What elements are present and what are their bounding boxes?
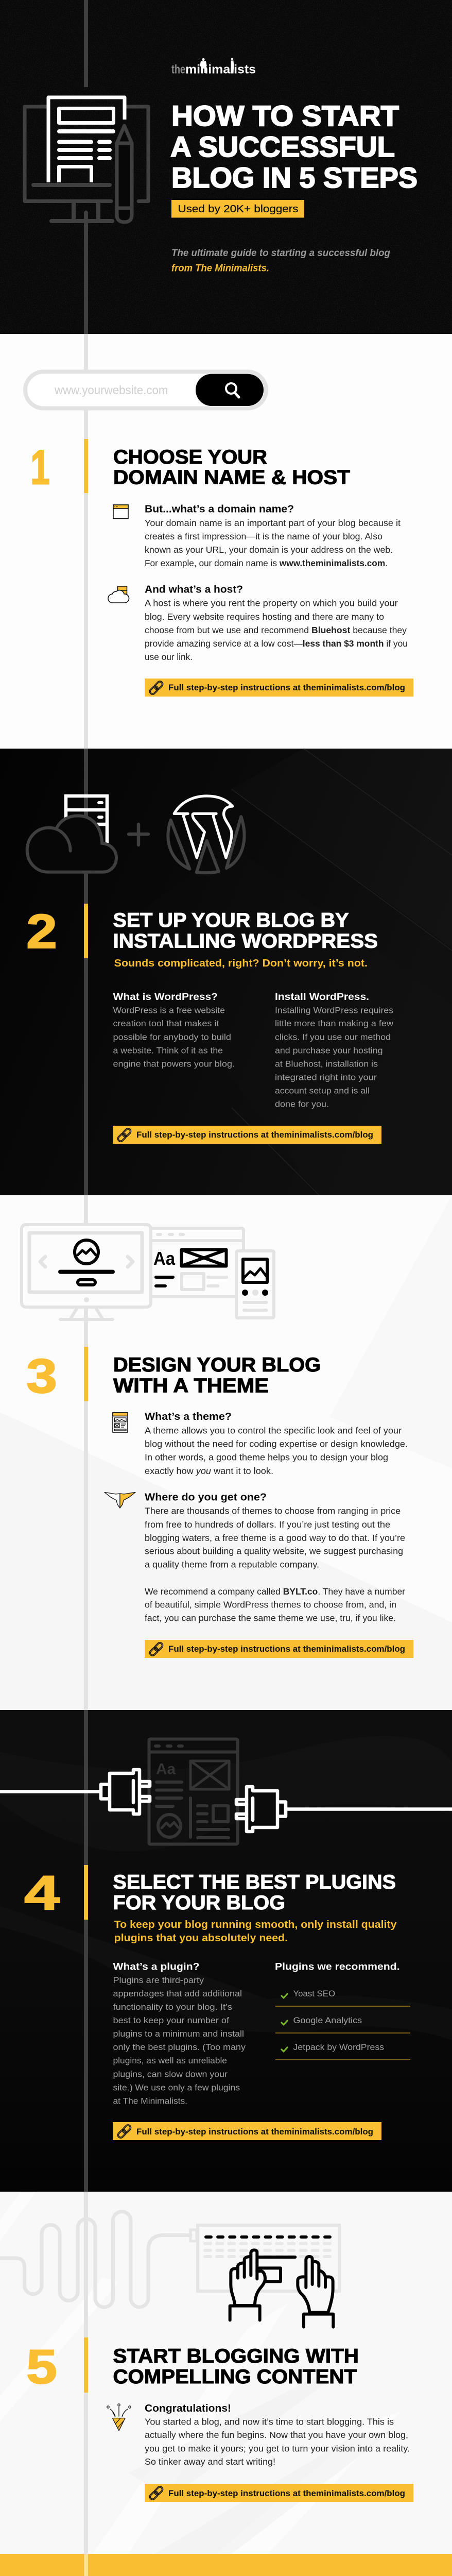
text: install WordPress: at Bluehost, installation is (275, 1059, 378, 1069)
text: congratulations: You started a blog, and now it’s time to start blogging. This is (145, 2416, 394, 2427)
text: where to get one: There are thousands of themes to choose from ranging in price (145, 1506, 401, 1516)
icon: left plug (0, 1770, 150, 1814)
text: what is WordPress: What is WordPress? (113, 991, 218, 1003)
step 1 marker (84, 439, 88, 493)
button: instructions (113, 2122, 381, 2140)
text: what's a plugin: What’s a plugin? (113, 1961, 200, 1972)
cable (0, 2212, 190, 2307)
heading: step 5: START BLOGGING WITH (113, 2345, 359, 2367)
icon: monitor, page and pencil (25, 97, 148, 222)
text: what is WordPress: WordPress is a free website (113, 1006, 225, 1015)
text: where to get one: serious about building a quality website, we suggest purchasing (145, 1546, 403, 1556)
text: host (145, 584, 408, 662)
icon: plus (129, 824, 148, 845)
number 4: 4 (24, 1866, 60, 1920)
text: install WordPress: Installing WordPress requires (275, 1006, 393, 1015)
icon: theme layout (113, 1413, 128, 1432)
subheading: step 2: Sounds complicated, right? Don’t worry, it’s not. (114, 958, 368, 969)
text: where to get one (145, 1492, 405, 1623)
item: Jetpack by WordPress (275, 2043, 410, 2060)
text: host: provide amazing service at a low cost—less than $3 month if you (145, 638, 408, 649)
text: domain name: known as your URL, your domain is your address on the web. (145, 545, 393, 555)
badge: used by bloggers (171, 200, 304, 217)
icon: winged logo (105, 1492, 135, 1508)
panel: step 1 (0, 334, 452, 749)
panel: footer call to action (0, 2554, 452, 2576)
text: install WordPress: account setup and is all (275, 1086, 370, 1095)
text: what's a theme: In other words, a good theme helps you to design your blog (145, 1452, 388, 1463)
text: what's a plugin: site.) We use only a few plugins (113, 2083, 240, 2092)
subheading: step 4: plugins that you absolutely need. (114, 1933, 288, 1944)
text: what's a plugin: best to keep your number of (113, 2016, 229, 2025)
text: where to get one: blogging waters, a free theme is a good way to do that. If you’re (145, 1533, 405, 1543)
text: what's a plugin: only the best plugins. (Too many (113, 2043, 246, 2052)
heading: step 5 (113, 2345, 359, 2388)
logo: The Minimalists: the (171, 63, 185, 76)
timeline: step 5 (84, 2192, 88, 2554)
text: what's a theme: blog without the need for coding expertise or design knowledge. (145, 1438, 408, 1449)
panel: step 3 (0, 1195, 452, 1710)
text: what's a theme: exactly how you want it to look. (145, 1466, 273, 1476)
text: what's a theme (145, 1411, 408, 1476)
gray keys (205, 2244, 333, 2257)
button: instructions: Full step-by-step instructions at theminimalists.com/blog (168, 683, 405, 692)
icon: WordPress logo (168, 796, 244, 873)
number 5: 5 (26, 2340, 57, 2394)
title: BLOG IN 5 STEPS (171, 161, 418, 194)
logo: The Minimalists (171, 58, 256, 76)
text: congratulations: So tinker away and start writing! (145, 2456, 275, 2467)
text: congratulations: actually where the fun begins. Now that you have your own blog, (145, 2430, 408, 2440)
black keys (206, 2235, 333, 2239)
heading: step 1 (113, 446, 350, 488)
text: what is WordPress: engine that powers your blog. (113, 1059, 235, 1069)
timeline end (86, 2554, 133, 2576)
step 5 marker (84, 2337, 88, 2393)
subtitle (171, 248, 390, 274)
illustration: keyboard (0, 2212, 339, 2327)
text: host: And what’s a host? (145, 584, 243, 596)
text: what is WordPress: possible for anybody to build (113, 1033, 231, 1042)
browser window: Aa (153, 1248, 176, 1269)
timeline: hero (84, 0, 88, 334)
text: where to get one: Where do you get one? (145, 1492, 267, 1503)
item: Yoast SEO (275, 1989, 410, 2006)
text: install WordPress: integrated right into your (275, 1073, 377, 1082)
browser window (150, 1228, 244, 1297)
timeline: step 4 (84, 1710, 88, 2192)
heading: step 4: SELECT THE BEST PLUGINS (113, 1871, 396, 1893)
subheading: step 4: To keep your blog running smooth, only install quality (114, 1919, 397, 1930)
subtitle: The ultimate guide to starting a successful blog (171, 248, 390, 259)
button: instructions (145, 679, 413, 697)
text: where to get one: fact, you can purchase the same theme we use, tru, if you like. (145, 1613, 396, 1623)
text: what's a plugin: appendages that add additional (113, 1989, 242, 1998)
item: Google Analytics (275, 2016, 410, 2033)
timeline: step 3 (84, 1195, 88, 1710)
text: congratulations (145, 2403, 410, 2467)
item: Jetpack by WordPress: Jetpack by WordPress (293, 2043, 384, 2052)
search bar (25, 372, 266, 408)
heading: step 3 (113, 1354, 321, 1397)
illustration: responsive theme (22, 1225, 274, 1319)
text: what's a theme: A theme allows you to control the specific look and feel of your (145, 1425, 402, 1435)
icon: right plug (236, 1787, 452, 1832)
icon: cloud server (108, 586, 129, 603)
list: recommended plugins (275, 1961, 410, 2060)
heading: step 2 (113, 909, 378, 952)
text: host: choose from but we use and recommend Bluehost because they (145, 625, 407, 635)
text: congratulations: Congratulations! (145, 2403, 231, 2414)
text: what's a plugin: functionality to your blog. It’s (113, 2003, 232, 2012)
desktop monitor (22, 1225, 151, 1319)
button: instructions: Full step-by-step instructions at theminimalists.com/blog (136, 2127, 373, 2137)
text: domain name: Your domain name is an important part of your blog because it (145, 518, 401, 528)
text: what's a plugin (113, 1961, 246, 2106)
subheading: step 4 (114, 1919, 397, 1944)
text: host: use our link. (145, 652, 193, 662)
text: where to get one: from free to hundreds of dollars. If you’re just testing out the (145, 1519, 390, 1530)
timeline: step 2 (84, 749, 88, 1195)
text: what is WordPress: creation tool that makes it (113, 1019, 219, 1028)
heading: step 2: SET UP YOUR BLOG BY (113, 909, 349, 931)
badge: used by bloggers: Used by 20K+ bloggers (178, 204, 299, 215)
text: install WordPress: and purchase your hosting (275, 1046, 383, 1055)
text: domain name: For example, our domain name is www.theminimalists.com. (145, 558, 388, 568)
panel: step 4 (0, 1710, 452, 2192)
text: install WordPress (275, 991, 393, 1109)
text: what's a plugin: plugins to a minimum and install (113, 2029, 244, 2039)
heading: step 1: DOMAIN NAME & HOST (113, 467, 350, 488)
illustration: plugin page (149, 1739, 238, 1844)
item: Google Analytics: Google Analytics (293, 2016, 362, 2025)
text: install WordPress: done for you. (275, 1099, 329, 1109)
icon: party popper (107, 2404, 131, 2431)
heading: step 5: COMPELLING CONTENT (113, 2366, 357, 2388)
panel: step 2 (0, 749, 452, 1195)
logo: The Minimalists: minimalists (185, 63, 256, 76)
button: instructions (145, 1640, 413, 1658)
text: install WordPress: clicks. If you use our method (275, 1033, 391, 1042)
subtitle: from The Minimalists. (171, 263, 269, 274)
title: HOW TO START (171, 99, 399, 132)
text: domain name: creates a first impression—it is the name of your blog. Also (145, 531, 383, 541)
heading: step 1: CHOOSE YOUR (113, 446, 267, 468)
number 2: 2 (26, 904, 57, 958)
text: where to get one: a quality theme from a reputable company. (145, 1560, 319, 1570)
panel: step 5 (0, 2192, 452, 2554)
text: domain name: But...what’s a domain name? (145, 504, 294, 515)
text: domain name (145, 504, 401, 568)
illustration: plugin page: Aa (156, 1761, 176, 1778)
button: instructions: Full step-by-step instructions at theminimalists.com/blog (168, 1644, 405, 1654)
text: what's a plugin: Plugins are third-party (113, 1976, 204, 1985)
button: instructions (113, 1126, 381, 1144)
icon: server and cloud (27, 796, 116, 872)
text: install WordPress: little more than making a few (275, 1019, 393, 1028)
step 3 marker (84, 1347, 88, 1401)
button: instructions: Full step-by-step instructions at theminimalists.com/blog (168, 2488, 405, 2498)
text: where to get one: We recommend a company called BYLT.co. They have a number (145, 1586, 405, 1597)
text: what's a theme: What’s a theme? (145, 1411, 232, 1422)
heading: step 3: DESIGN YOUR BLOG (113, 1354, 321, 1376)
text: what is WordPress: a website. Think of it as the (113, 1046, 223, 1055)
title: A SUCCESSFUL (170, 130, 395, 163)
button: instructions (145, 2484, 413, 2502)
heading: step 2: INSTALLING WORDPRESS (113, 930, 378, 952)
text: host: blog. Every website requires hosting and there are many to (145, 612, 384, 622)
icon: browser window (113, 505, 128, 518)
text: congratulations: you get to make it yours; you get to turn your vision into a reality. (145, 2443, 410, 2453)
panel: hero (0, 0, 452, 334)
heading: step 4 (113, 1871, 396, 1914)
heading: step 3: WITH A THEME (113, 1375, 269, 1397)
number 1: 1 (30, 440, 50, 495)
search bar: www.yourwebsite.com (54, 383, 168, 397)
button: instructions: Full step-by-step instructions at theminimalists.com/blog (136, 1130, 373, 1140)
step 2 marker (84, 904, 88, 958)
text: what's a plugin: at The Minimalists. (113, 2096, 187, 2106)
text: host: A host is where you rent the property on which you build your (145, 598, 398, 608)
text: where to get one: of beautiful, simple WordPress themes to choose from, and, in (145, 1599, 396, 1609)
text: install WordPress: Install WordPress. (275, 991, 369, 1003)
timeline: step 1 (84, 334, 88, 749)
heading: step 4: FOR YOUR BLOG (113, 1892, 285, 1914)
list: recommended plugins: Plugins we recommend. (275, 1961, 400, 1972)
hands (230, 2250, 333, 2327)
phone (236, 1251, 274, 1318)
step 4 marker (84, 1865, 88, 1920)
text: what is WordPress (113, 991, 235, 1069)
text: what's a plugin: plugins, as well as unreliable (113, 2056, 227, 2065)
title (170, 99, 418, 194)
number 3: 3 (26, 1349, 57, 1403)
text: what's a plugin: plugins, can slow down your (113, 2070, 228, 2079)
item: Yoast SEO: Yoast SEO (293, 1989, 335, 1998)
